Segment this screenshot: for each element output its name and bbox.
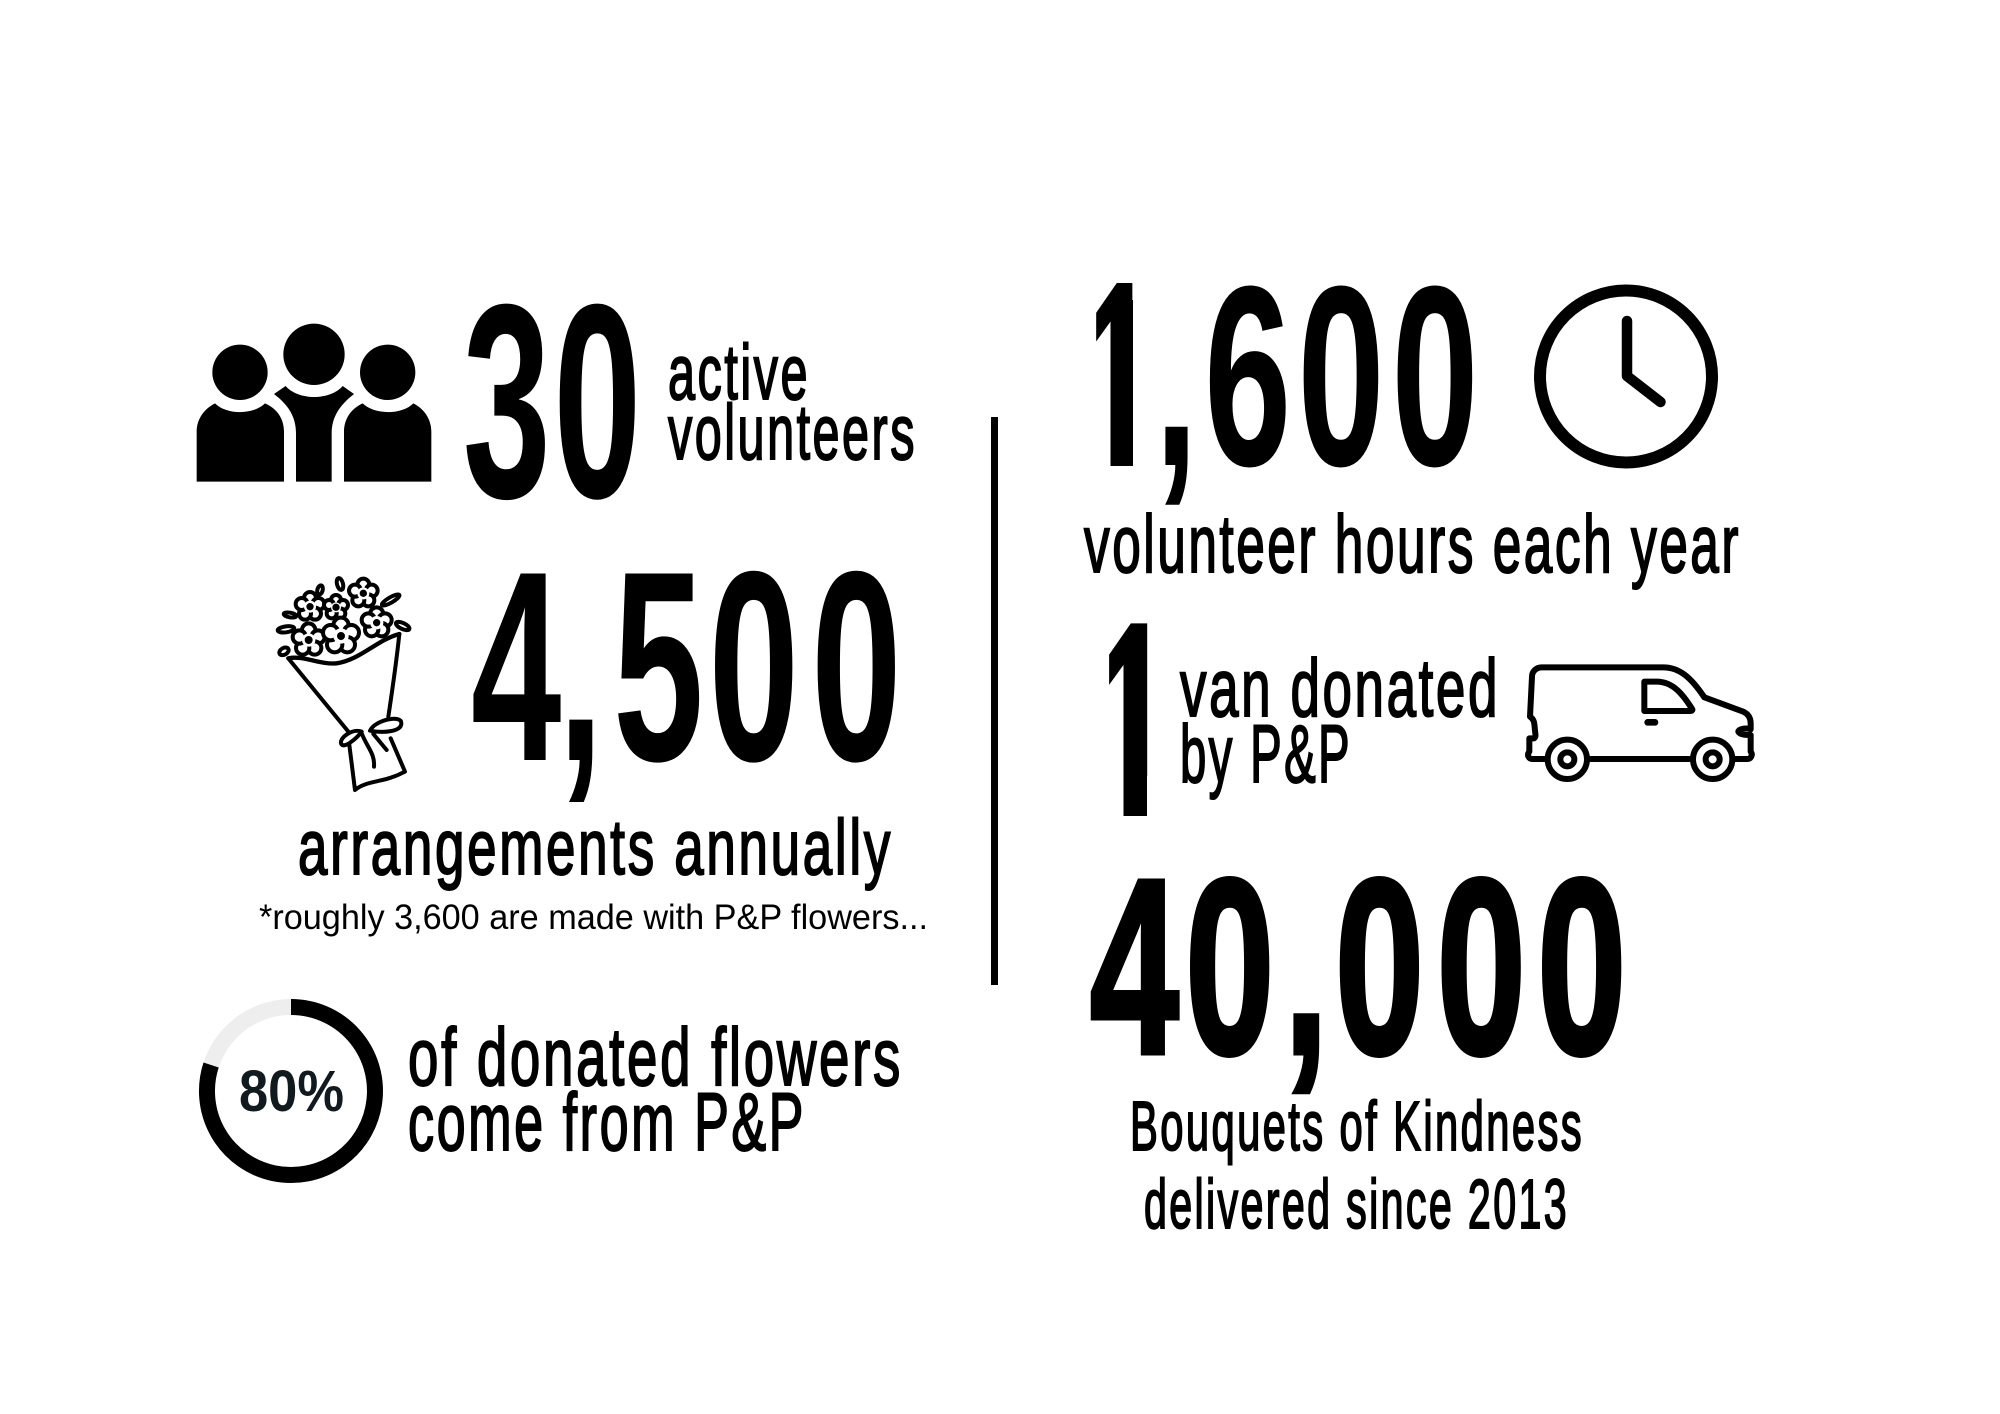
label: of donated flowers come from P&P: of donated flowers [408,1012,903,1103]
label: van donated by P&P: by P&P [1180,709,1352,800]
number: 1,600: 1 [1088,225,1155,523]
panel: arrangements annually [259,516,928,937]
icon: three people [197,324,431,482]
label: Bouquets of Kindness delivered since 2013: Bouquets of Kindness [1130,1087,1584,1165]
icon: clock [1540,290,1712,462]
number: 1: 1 [1100,563,1171,877]
chart: progress ring 80%: 80% [239,1059,344,1124]
number: 4,500: 4,500 [471,516,902,818]
label: van donated by P&P: van donated [1180,643,1500,734]
label: Bouquets of Kindness delivered since 2013 [1130,1087,1584,1243]
label: of donated flowers come from P&P: come from P&P [408,1077,806,1168]
label: active volunteers [668,328,917,476]
label: Bouquets of Kindness delivered since 2013: delivered since 2013 [1144,1165,1569,1243]
panel: 80% of donated flowers [207,1007,903,1175]
number: 40,000: 40,000 [1090,828,1626,1107]
panel: active volunteers [197,246,917,556]
label: arrangements annually: arrangements annually [298,803,893,891]
chart: progress ring 80% [207,1007,375,1175]
panel: volunteer hours [1080,225,1741,590]
footnote: *roughly 3,600 are made with P&P flowers... [259,898,928,937]
label: of donated flowers come from P&P [408,1012,903,1168]
label: van donated by P&P [1180,643,1500,800]
divider [991,417,998,985]
number: 1,600: ,600 [1154,233,1479,521]
icon: van [1528,667,1752,779]
panel: van donated [1090,563,1752,877]
icon: bouquet [277,577,411,790]
label: active volunteers: volunteers [668,388,917,476]
label: active volunteers: active [668,328,810,416]
number: 30: 30 [463,246,641,556]
panel: bouquets of kindness [1090,828,1626,1243]
